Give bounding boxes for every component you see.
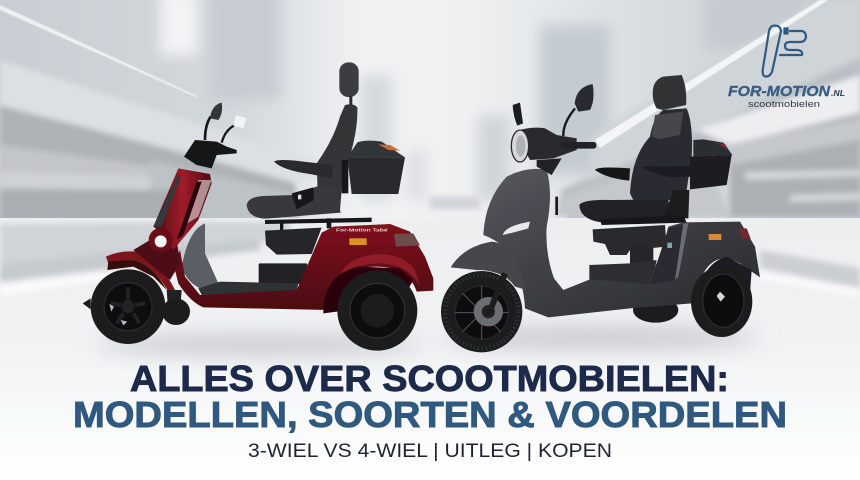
seat headrest (339, 62, 359, 97)
logo suffix: .NL (831, 89, 845, 98)
floor deck (198, 282, 298, 295)
body trim (650, 223, 688, 284)
hidden rear wheel (162, 290, 190, 325)
footrest box (259, 263, 307, 284)
rear logo mark (738, 228, 751, 239)
armrest (274, 160, 333, 178)
front fender (451, 242, 527, 290)
rear wheel (323, 267, 417, 351)
left armrest (595, 167, 630, 181)
rear wheel (691, 257, 752, 337)
scooter: red four-wheel mobility scooter (83, 62, 433, 351)
scooter: grey three-wheel mobility scooter (441, 75, 760, 352)
logo: For-Motion (728, 26, 845, 109)
front fender (106, 251, 175, 292)
front wheel (441, 271, 522, 352)
main body (483, 169, 760, 317)
rear indicator (709, 234, 721, 240)
headlight (149, 228, 173, 252)
subtitle: 3-WIEL VS 4-WIEL | UITLEG | KOPEN (248, 440, 612, 462)
rear lights and reflector (349, 238, 367, 245)
brand text on body: For-Motion Tabé (336, 227, 388, 233)
hidden rear wheel (633, 297, 678, 323)
title line 2: MODELLEN, SOORTEN & VOORDELEN (73, 394, 787, 435)
under-seat box (593, 225, 667, 267)
left streaks (0, 60, 340, 180)
ground shadows (95, 328, 760, 354)
under-seat box (265, 228, 322, 255)
right streaks (560, 58, 860, 225)
logo wordmark: FOR-MOTION (728, 83, 831, 100)
seat headrest (653, 75, 686, 110)
seatbelt buckle (292, 187, 314, 209)
steering column (153, 168, 212, 250)
right armrest (641, 166, 692, 177)
front wheel (83, 269, 165, 344)
seat backrest (317, 104, 357, 210)
red body (173, 224, 433, 310)
seat rack (265, 218, 372, 231)
ignition key (555, 197, 558, 215)
logo tagline: scootmobielen (748, 99, 820, 109)
inner leg shield (182, 223, 218, 290)
handlebar and headlight (511, 128, 596, 175)
front indicator light (503, 222, 530, 235)
mirrors (513, 84, 594, 136)
seat backrest (630, 108, 692, 200)
handlebar (184, 140, 237, 168)
logo icon: pill and plug cable (763, 26, 806, 76)
rear storage box (342, 141, 405, 194)
rear storage box (690, 139, 732, 189)
footrest box (589, 260, 657, 285)
rear fender highlight (339, 254, 420, 287)
road / floor (0, 218, 860, 480)
mirrors (205, 103, 247, 143)
seat cushion (247, 186, 341, 219)
seat rack (600, 215, 687, 225)
title line 1: ALLES OVER SCOOTMOBIELEN: (130, 358, 729, 399)
seat cushion (579, 199, 670, 223)
